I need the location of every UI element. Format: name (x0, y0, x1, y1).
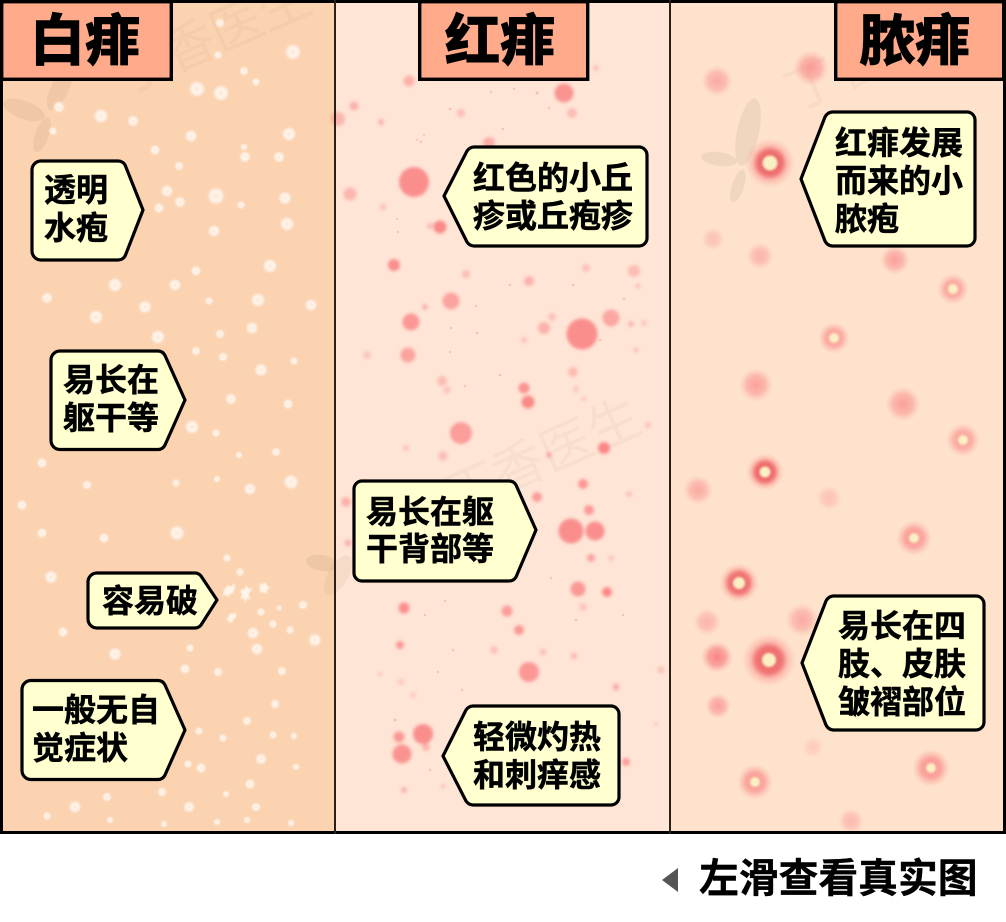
callout: 易长在躯干背部等: 干背部等 (366, 531, 494, 567)
callout: 红色的小丘疹或丘疱疹: 疹或丘疱疹 (473, 198, 633, 234)
icon: left arrow (662, 868, 678, 892)
heading tag: 脓痱 (836, 2, 1004, 79)
callout: 透明水疱: 透明 (44, 172, 108, 208)
footer hint: swipe left: 左滑查看真实图 (699, 857, 978, 901)
skin rash: faint specks (394, 88, 625, 771)
callout: 轻微灼热和刺痒感 (443, 706, 619, 805)
callout: 易长在四肢、皮肤皱褶部位: 易长在四 (838, 608, 966, 644)
callout: 易长在躯干等 (51, 351, 185, 450)
callout: 红色的小丘疹或丘疱疹: 红色的小丘 (473, 160, 633, 196)
callout: 一般无自觉症状: 觉症状 (32, 730, 128, 766)
callout: 红痱发展而来的小脓疱: 红痱发展 (835, 125, 963, 161)
heading tag: 红痱: 红痱 (445, 10, 555, 72)
heading tag: 红痱 (420, 2, 588, 79)
heading tag: 白痱: 白痱 (30, 10, 140, 72)
watermark: leaf and brand (0, 0, 339, 574)
callout: 轻微灼热和刺痒感: 轻微灼热 (473, 719, 601, 755)
callout: 容易破 (88, 573, 217, 628)
callout: 一般无自觉症状: 一般无自 (32, 692, 160, 728)
watermark: brand and leaf (318, 388, 650, 599)
callout: 红痱发展而来的小脓疱: 脓疱 (835, 201, 899, 237)
panel: 红痱 (318, 0, 670, 834)
callout: 轻微灼热和刺痒感: 和刺痒感 (473, 757, 601, 793)
skin rash: red spots (331, 65, 664, 793)
callout: 易长在躯干等: 易长在 (63, 362, 159, 398)
panel: 白痱 (0, 0, 339, 834)
callout: 容易破: 容易破 (102, 583, 198, 619)
callout: 易长在四肢、皮肤皱褶部位 (802, 596, 984, 730)
callout: 一般无自觉症状 (22, 680, 185, 780)
callout: 易长在躯干背部等 (354, 481, 536, 581)
callout: 易长在躯干背部等: 易长在躯 (366, 494, 494, 530)
watermark: brand and leaf: 丁香医生 (436, 388, 650, 526)
callout: 透明水疱 (32, 161, 143, 260)
callout: 易长在四肢、皮肤皱褶部位: 皱褶部位 (838, 684, 966, 720)
watermark: leaf and brand (700, 0, 990, 204)
callout: 红痱发展而来的小脓疱: 而来的小 (835, 163, 963, 199)
heading tag: 脓痱: 脓痱 (860, 10, 970, 72)
heading tag: 白痱 (2, 2, 171, 79)
skin blisters: white (17, 18, 322, 828)
callout: 易长在四肢、皮肤皱褶部位: 肢、皮肤 (838, 646, 966, 682)
skin rash: pustules (683, 50, 980, 834)
callout: 红痱发展而来的小脓疱 (801, 112, 975, 246)
callout: 易长在躯干等: 躯干等 (63, 400, 159, 436)
callout: 透明水疱: 水疱 (44, 210, 108, 246)
panel: 脓痱 (670, 0, 1006, 834)
callout: 红色的小丘疹或丘疱疹 (444, 147, 647, 246)
broken blisters (223, 582, 270, 623)
